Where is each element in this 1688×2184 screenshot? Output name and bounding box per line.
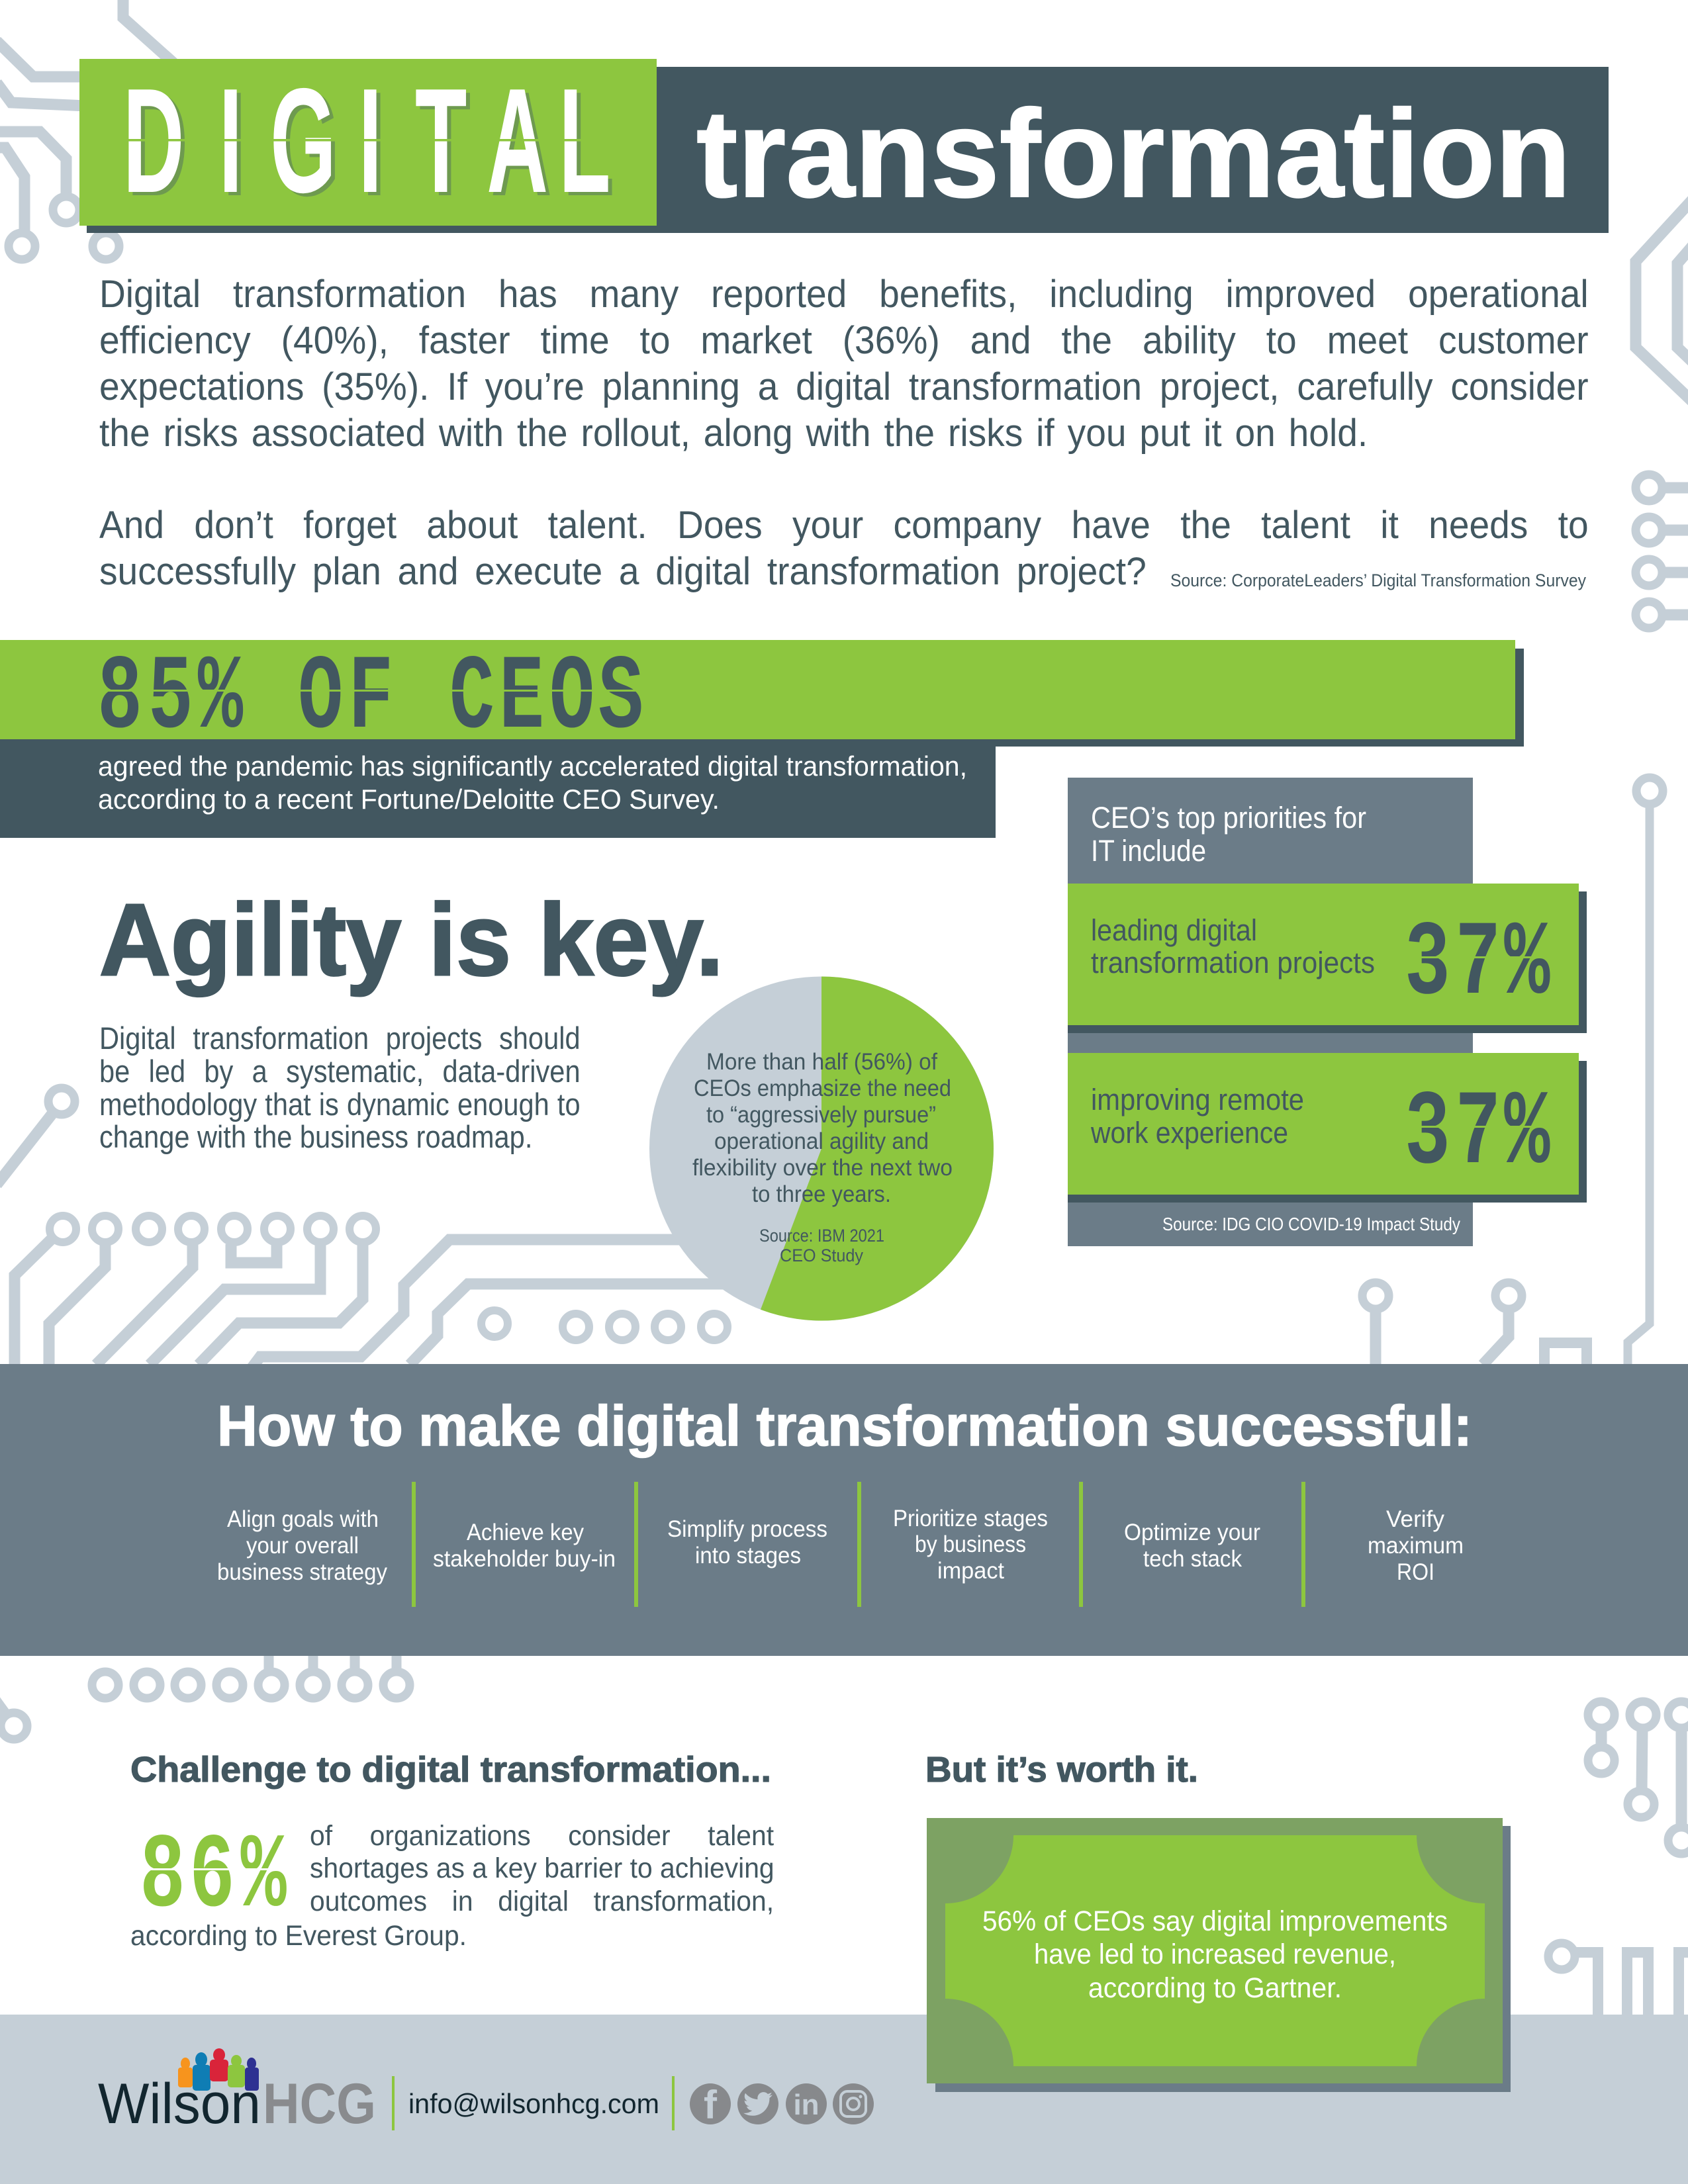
text block: talent shortages: of organizations consider talent: [310, 1820, 774, 1852]
circuit pattern: right side upper: [1636, 197, 1688, 628]
text: according to Everest Group: according to Everest Group.: [130, 1920, 467, 1952]
step 3: Simplify process: [667, 1516, 827, 1542]
step 6: maximum: [1368, 1533, 1464, 1559]
panel heading: [1091, 801, 1366, 868]
step 4: [893, 1506, 1048, 1584]
stat: 85% of CEOs: [96, 638, 652, 758]
title word: transformation: transformation: [696, 84, 1571, 223]
pie text: CEOs emphasize the need: [694, 1075, 951, 1101]
stat: 85% of CEOs: F: [348, 638, 393, 758]
source note: Source: IDG CIO COVID-19 Impact Study: [1162, 1214, 1460, 1234]
pie text: operational agility and: [714, 1128, 929, 1154]
text block: agility paragraph: change with the business roadmap.: [99, 1119, 532, 1154]
footer band: [0, 2015, 1688, 2184]
callout: 56% of CEOs: have led to increased revenue,: [1034, 1938, 1396, 1970]
callout: 56% of CEOs: [927, 1818, 1511, 2092]
text block: talent shortages: shortages as a key barrier to achieving: [310, 1852, 774, 1884]
title word: DIGITAL shadow and face: DIGITAL: [123, 57, 611, 224]
card: improving remote work experience: 37%: [1405, 1074, 1550, 1194]
text block: intro paragraphs: efficiency (40%), faster time to market (36%) and the ability to meet customer: [99, 319, 1589, 362]
step 4: Prioritize stages: [893, 1506, 1048, 1531]
pie text: Source: IBM 2021: [759, 1226, 884, 1246]
step 5: Optimize your: [1124, 1520, 1260, 1545]
stat: 85% of CEOs: 5: [148, 638, 193, 758]
email: info@wilsonhcg.com: [408, 2088, 659, 2119]
heading: Agility is key: Agility is key.: [99, 883, 724, 997]
logo people: [178, 2048, 259, 2091]
text: pandemic statement: [98, 751, 967, 815]
callout: 56% of CEOs: 56% of CEOs say digital improvements: [982, 1905, 1448, 1937]
icon: linkedin: in: [793, 2089, 820, 2121]
heading: challenge: Challenge to digital transformation...: [130, 1750, 771, 1790]
text: pandemic statement: agreed the pandemic has significantly accelerated digital transformation,: [98, 751, 967, 782]
heading: worth it: But it’s worth it.: [925, 1750, 1198, 1790]
logo word: HCG: HCG: [263, 2072, 376, 2136]
card: leading digital transformation projects: leading digital: [1091, 913, 1257, 947]
step 6: ROI: [1397, 1559, 1434, 1585]
circuit pattern: lower left: [0, 1088, 761, 1370]
text block: talent shortages: [310, 1820, 774, 1917]
text block: agility paragraph: methodology that is dynamic enough to: [99, 1087, 581, 1122]
pie text: [692, 1049, 953, 1265]
band: how to make digital transformation successful: [0, 1364, 1688, 1656]
step 3: into stages: [695, 1543, 801, 1569]
panel heading: CEO’s top priorities for: [1091, 801, 1366, 835]
band heading: How to make digital transformation successful:: [217, 1394, 1472, 1458]
text: pandemic statement: according to a recent Fortune/Deloitte CEO Survey.: [98, 784, 720, 815]
stat: 85% of CEOs: 8: [97, 638, 142, 758]
icon: linkedin: [786, 2083, 827, 2124]
text block: agility paragraph: be led by a systematic, data-driven: [99, 1054, 581, 1089]
step 2: stakeholder buy-in: [433, 1546, 616, 1572]
callout: 56% of CEOs: according to Gartner.: [1088, 1972, 1342, 2004]
step 6: [1368, 1506, 1464, 1585]
step 2: Achieve key: [467, 1520, 584, 1545]
stat: 85% of CEOs: S: [598, 638, 643, 758]
text block: talent shortages: outcomes in digital transformation,: [310, 1886, 774, 1917]
step 5: tech stack: [1143, 1546, 1242, 1572]
logo word: Wilson: Wilson: [98, 2072, 261, 2136]
step 5: [1124, 1520, 1260, 1572]
title word: DIGITAL shadow and face: DIGITAL: [127, 60, 615, 227]
stat: 85% of CEOs: E: [499, 638, 544, 758]
pie text: to three years.: [752, 1181, 891, 1207]
stat: 85% of CEOs: C: [449, 638, 494, 758]
pie text: CEO Study: [780, 1246, 863, 1265]
circuit pattern: right side lower: [1362, 778, 1663, 1365]
circuit pattern: below band left: [0, 1655, 410, 1739]
text block: intro paragraphs: And don’t forget about talent. Does your company have the talent it needs to: [99, 504, 1589, 547]
text block: intro paragraphs: Digital transformation has many reported benefits, including improved operational: [99, 273, 1589, 316]
stat: 86%: 86%: [140, 1817, 287, 1937]
step 4: impact: [937, 1558, 1004, 1584]
text block: intro paragraphs: [99, 273, 1589, 593]
icon: facebook: [690, 2083, 731, 2127]
text block: agility paragraph: [99, 1021, 581, 1154]
step 3: [667, 1516, 827, 1569]
logo: WilsonHCG: [98, 2048, 376, 2136]
card: improving remote work experience: [1068, 1053, 1587, 1203]
pie text: flexibility over the next two: [692, 1155, 953, 1181]
step 1: Align goals with: [227, 1506, 379, 1532]
step 1: business strategy: [217, 1559, 387, 1585]
panel: CEO priorities: [1068, 778, 1587, 1246]
title banner: [79, 57, 1609, 233]
banner: 85% of CEOs: [0, 638, 1524, 838]
text block: intro paragraphs: the risks associated with the rollout, along with the risks if you put it on hold.: [99, 412, 1368, 455]
stat: 85% of CEOs: %: [198, 638, 244, 758]
step 1: [217, 1506, 387, 1585]
step 6: Verify: [1386, 1506, 1444, 1532]
icon: facebook: f: [704, 2083, 718, 2127]
icon: instagram: [833, 2083, 874, 2124]
stat: 85% of CEOs: O: [298, 638, 343, 758]
step 1: your overall: [246, 1533, 359, 1559]
pie text: More than half (56%) of: [706, 1049, 937, 1075]
icon: twitter: [737, 2083, 778, 2124]
card: improving remote work experience: work experience: [1090, 1116, 1288, 1150]
panel heading: IT include: [1091, 834, 1206, 868]
card: leading digital transformation projects: transformation projects: [1091, 946, 1375, 979]
step 4: by business: [915, 1531, 1026, 1557]
stat: 85% of CEOs: O: [549, 638, 594, 758]
text block: agility paragraph: Digital transformation projects should: [99, 1021, 581, 1056]
text block: intro paragraphs: successfully plan and execute a digital transformation project?: [99, 550, 1147, 593]
pie chart: 56% of CEOs: [649, 977, 994, 1321]
text block: intro paragraphs: expectations (35%). If you’re planning a digital transformation project, carefully consider: [99, 365, 1589, 408]
step 2: [433, 1520, 616, 1572]
circuit pattern: top left: [0, 0, 173, 259]
circuit pattern: below band right: [1548, 1702, 1688, 2016]
pie text: to “aggressively pursue”: [706, 1102, 936, 1128]
card: leading digital transformation projects: 37%: [1405, 905, 1550, 1024]
card: improving remote work experience: improving remote: [1091, 1083, 1304, 1116]
card: leading digital transformation projects: [1068, 884, 1587, 1033]
